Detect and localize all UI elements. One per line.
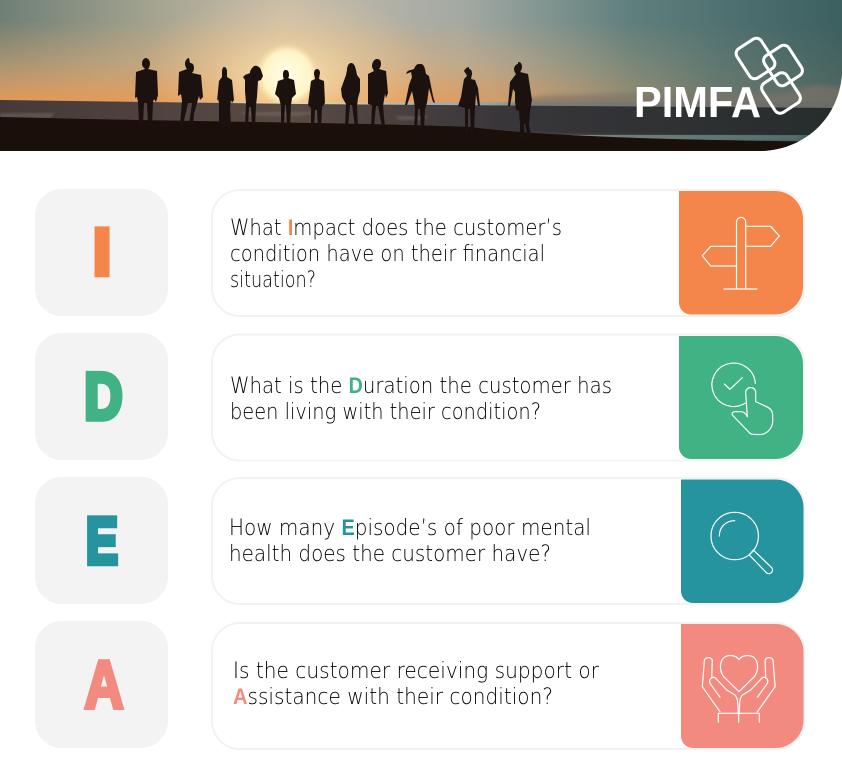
question card I: condition have on their financial — [230, 242, 545, 267]
question card E — [212, 478, 804, 604]
header photo: sunset silhouettes — [0, 0, 842, 151]
logo: overlapping rounded diamonds — [734, 36, 805, 116]
question card I — [212, 190, 804, 316]
letter tile D — [35, 333, 168, 460]
icon panel: tick and pointing hand — [679, 336, 803, 459]
letter tile D: D — [84, 359, 123, 433]
row A — [35, 621, 804, 749]
question card E: How many Episode’s of poor mental — [229, 515, 591, 541]
question card D — [212, 334, 804, 460]
row I — [35, 189, 804, 316]
question card A — [212, 623, 804, 749]
question card A: Assistance with their condition? — [233, 684, 553, 710]
row D — [35, 333, 804, 460]
PIMFA logo — [634, 36, 805, 127]
question card A: Is the customer receiving support or — [233, 659, 600, 684]
question card I: What Impact does the customer’s — [230, 215, 562, 241]
icon panel: magnifying glass — [681, 480, 804, 603]
letter tile I: I — [93, 214, 111, 288]
question card I: situation? — [230, 268, 316, 293]
letter tile A: A — [84, 647, 124, 723]
letter tile A — [35, 621, 168, 748]
question card D: What is the Duration the customer has — [230, 373, 612, 399]
letter tile I — [35, 189, 168, 316]
letter tile E: E — [86, 505, 118, 578]
question card D: been living with their condition? — [230, 400, 541, 425]
question card E: health does the customer have? — [229, 542, 551, 567]
logo wordmark: PIMFA — [634, 79, 761, 127]
icon panel: hands holding heart — [681, 624, 804, 748]
silhouettes of people — [135, 58, 533, 138]
icon panel: signpost — [679, 191, 803, 314]
letter tile E — [35, 477, 168, 604]
row E — [35, 477, 804, 604]
